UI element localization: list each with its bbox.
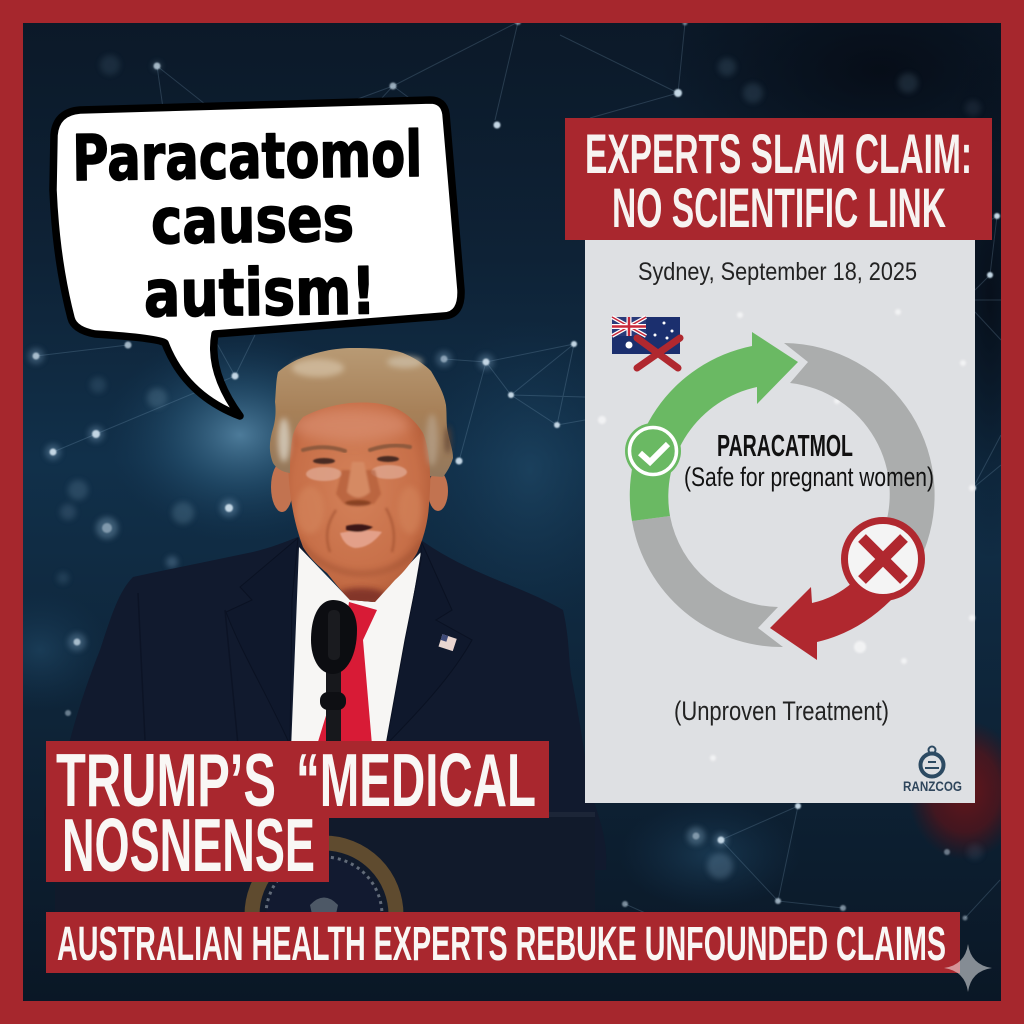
banner: Trump's medical nonsense: NOSNENSE <box>62 803 315 887</box>
icon: Australian flag with cross <box>612 317 680 368</box>
hair <box>270 348 453 477</box>
person at podium <box>70 348 595 912</box>
flag pin <box>438 634 457 651</box>
bubble text: causes <box>151 183 354 258</box>
date: Sydney, September 18, 2025 <box>638 258 917 286</box>
lower label: (Unproven Treatment) <box>674 696 889 726</box>
jacket seams <box>138 593 238 745</box>
icon: check <box>625 423 681 479</box>
icon: RANZCOG logo <box>903 746 962 794</box>
microphone <box>311 600 357 745</box>
hair highlights <box>278 356 451 466</box>
head <box>270 348 453 606</box>
face <box>288 395 430 602</box>
center label: (Safe for pregnant women) <box>684 462 934 492</box>
banner: Trump's medical nonsense: TRUMP’S <box>56 738 276 822</box>
bubble text: autism! <box>143 254 376 332</box>
banner: experts slam claim <box>565 118 992 240</box>
banner: Trump's medical nonsense: “MEDICAL <box>296 738 536 822</box>
red tie <box>317 602 377 745</box>
bubble text: Paracatomol <box>72 118 423 195</box>
banner: Trump's medical nonsense <box>46 738 549 887</box>
speech bubble <box>53 100 461 416</box>
panel: experts card <box>585 240 975 803</box>
bubble text <box>72 118 424 333</box>
card specks <box>598 309 975 761</box>
suit jacket <box>44 537 606 870</box>
red arrow <box>770 582 893 660</box>
face shading <box>290 409 424 606</box>
ears <box>271 462 293 512</box>
icon: RANZCOG logo: RANZCOG <box>903 779 962 794</box>
gray arc bottom left <box>632 516 783 647</box>
center label: PARACATMOL <box>717 428 853 463</box>
center label <box>684 428 934 492</box>
icon: cross <box>844 520 922 598</box>
cycle diagram <box>625 332 935 660</box>
left lapel <box>226 538 298 745</box>
podium with seal <box>244 812 595 912</box>
icon: sparkle <box>944 944 992 992</box>
mouth <box>340 524 382 548</box>
nose <box>336 462 381 506</box>
eyebrows <box>303 446 410 451</box>
shirt <box>291 547 421 750</box>
right lapel <box>386 541 472 745</box>
eyes <box>306 456 407 481</box>
gray arc top right <box>784 343 935 560</box>
green arrow <box>630 332 798 521</box>
